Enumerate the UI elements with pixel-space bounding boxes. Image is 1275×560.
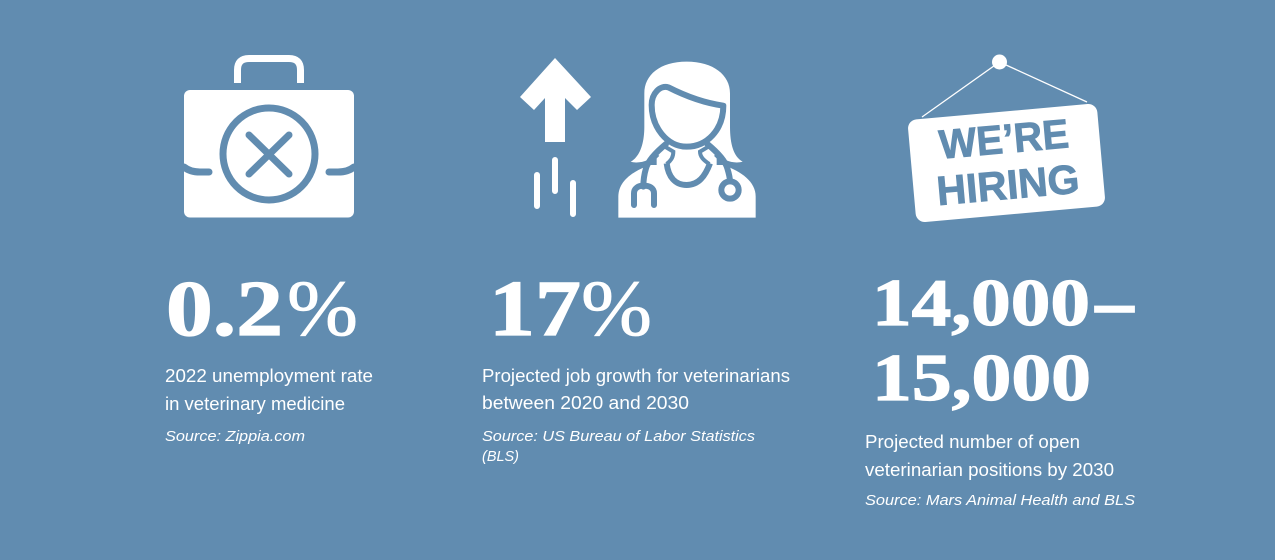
- icon: hiring sign: WE’RE: [937, 110, 1071, 168]
- icon: briefcase with X: [184, 58, 354, 218]
- description: open positions: Projected number of open: [865, 432, 1080, 452]
- stat: 14,000–: –: [1095, 266, 1134, 340]
- source: Mars Animal Health: Source: Mars Animal Health and BLS: [865, 492, 1135, 509]
- source: BLS continued: (BLS): [482, 448, 519, 465]
- source: Zippia: Source: Zippia.com: [165, 428, 305, 445]
- icon: veterinarian with stethoscope: [618, 62, 756, 218]
- panel: open positions: [865, 54, 1135, 509]
- description: positions by 2030: veterinarian positions by 2030: [865, 460, 1114, 480]
- stat: 0.2%: 0.2: [166, 266, 283, 353]
- panel: job growth: [482, 58, 790, 465]
- stat: 0.2%: [166, 266, 358, 353]
- icon: up arrow with motion lines: [520, 58, 591, 214]
- icon: hiring sign: HIRING: [935, 156, 1081, 214]
- stat: 0.2%: %: [287, 266, 358, 353]
- description: unemployment rate: 2022 unemployment rate: [165, 366, 373, 386]
- panel: unemployment rate: [165, 58, 373, 445]
- source: BLS: Source: US Bureau of Labor Statistics: [482, 428, 756, 445]
- stat: 15,000: 15,000: [872, 341, 1091, 415]
- description: date range: between 2020 and 2030: [482, 393, 689, 413]
- description: job growth: Projected job growth for veterinarians: [482, 366, 790, 386]
- stat: 14,000–: 14,000: [872, 266, 1090, 340]
- description: veterinary medicine: in veterinary medicine: [165, 394, 345, 414]
- stat: 17%: [489, 266, 652, 353]
- icon: hiring sign: [907, 54, 1106, 223]
- stat: 17%: 17: [489, 266, 581, 353]
- stat: 17%: %: [581, 266, 652, 353]
